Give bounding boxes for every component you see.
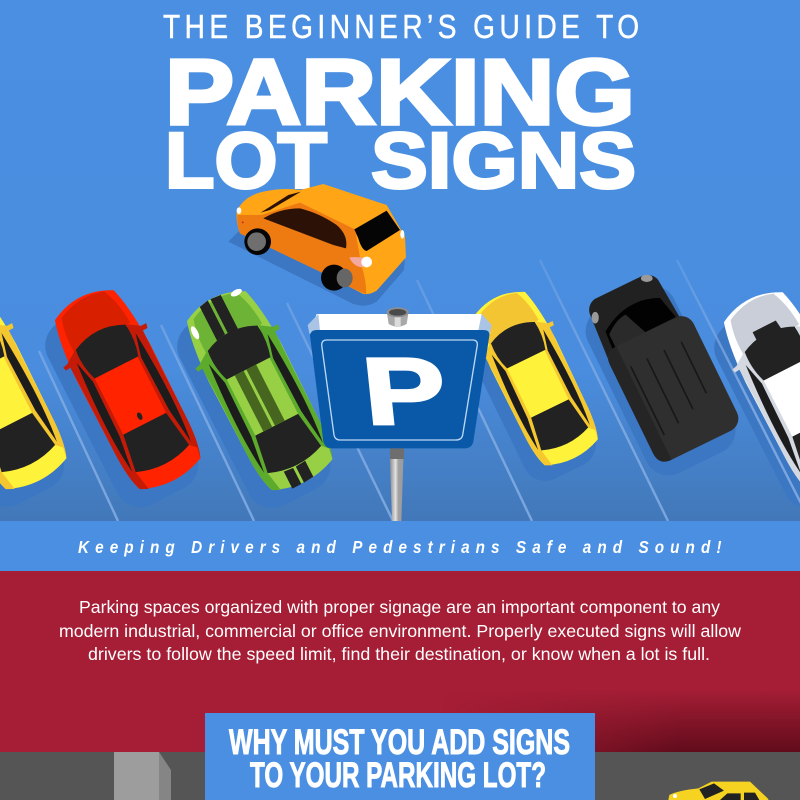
section heading: TO YOUR PARKING LOT? bbox=[250, 756, 546, 795]
title bbox=[163, 9, 639, 205]
orange car rear wheel bbox=[244, 228, 271, 255]
title: LOT bbox=[165, 116, 327, 204]
yellow taxi bbox=[668, 782, 768, 800]
heading box bbox=[205, 713, 595, 800]
intro paragraph: modern industrial, commercial or office environment. Properly executed signs will allow bbox=[59, 621, 741, 641]
section heading bbox=[229, 723, 570, 795]
section heading: WHY MUST YOU ADD SIGNS bbox=[229, 723, 570, 762]
intro paragraph: drivers to follow the speed limit, find their destination, or know when a lot is full. bbox=[88, 644, 710, 664]
white car, right edge bbox=[707, 278, 800, 504]
intro paragraph: Parking spaces organized with proper signage are an important component to any bbox=[79, 597, 720, 617]
sign top edge bbox=[308, 314, 492, 333]
orange car front wheel bbox=[321, 265, 353, 291]
intro panel corner shading bbox=[514, 697, 800, 752]
sign panel bbox=[310, 330, 489, 448]
sign letter P: P bbox=[358, 339, 451, 445]
sign pole bbox=[390, 448, 404, 521]
intro paragraph bbox=[59, 597, 741, 664]
black SUV bbox=[580, 263, 743, 466]
parking sign bbox=[308, 307, 492, 521]
car shadows bbox=[0, 278, 800, 518]
white car rear-view mirror notch bbox=[753, 320, 785, 347]
red car bbox=[38, 276, 215, 502]
title: PARKING bbox=[165, 40, 635, 144]
hero background: parking lot bbox=[0, 0, 800, 521]
intro panel bbox=[0, 571, 800, 752]
title: SIGNS bbox=[371, 116, 636, 204]
title: THE BEGINNER’S GUIDE TO bbox=[163, 9, 639, 46]
parking space lines bbox=[39, 260, 800, 521]
asphalt section bbox=[0, 752, 800, 800]
yellow car, right of sign bbox=[459, 280, 611, 476]
sign inner border bbox=[322, 340, 477, 440]
red car roof antenna bbox=[136, 412, 144, 421]
orange car bbox=[228, 184, 406, 306]
green striped car bbox=[170, 277, 348, 503]
sign bolt bbox=[387, 307, 409, 327]
yellow car, left edge bbox=[0, 276, 81, 502]
tagline: Keeping Drivers and Pedestrians Safe and Sound! bbox=[78, 537, 722, 557]
tagline band bbox=[0, 521, 800, 571]
building bbox=[114, 752, 171, 800]
